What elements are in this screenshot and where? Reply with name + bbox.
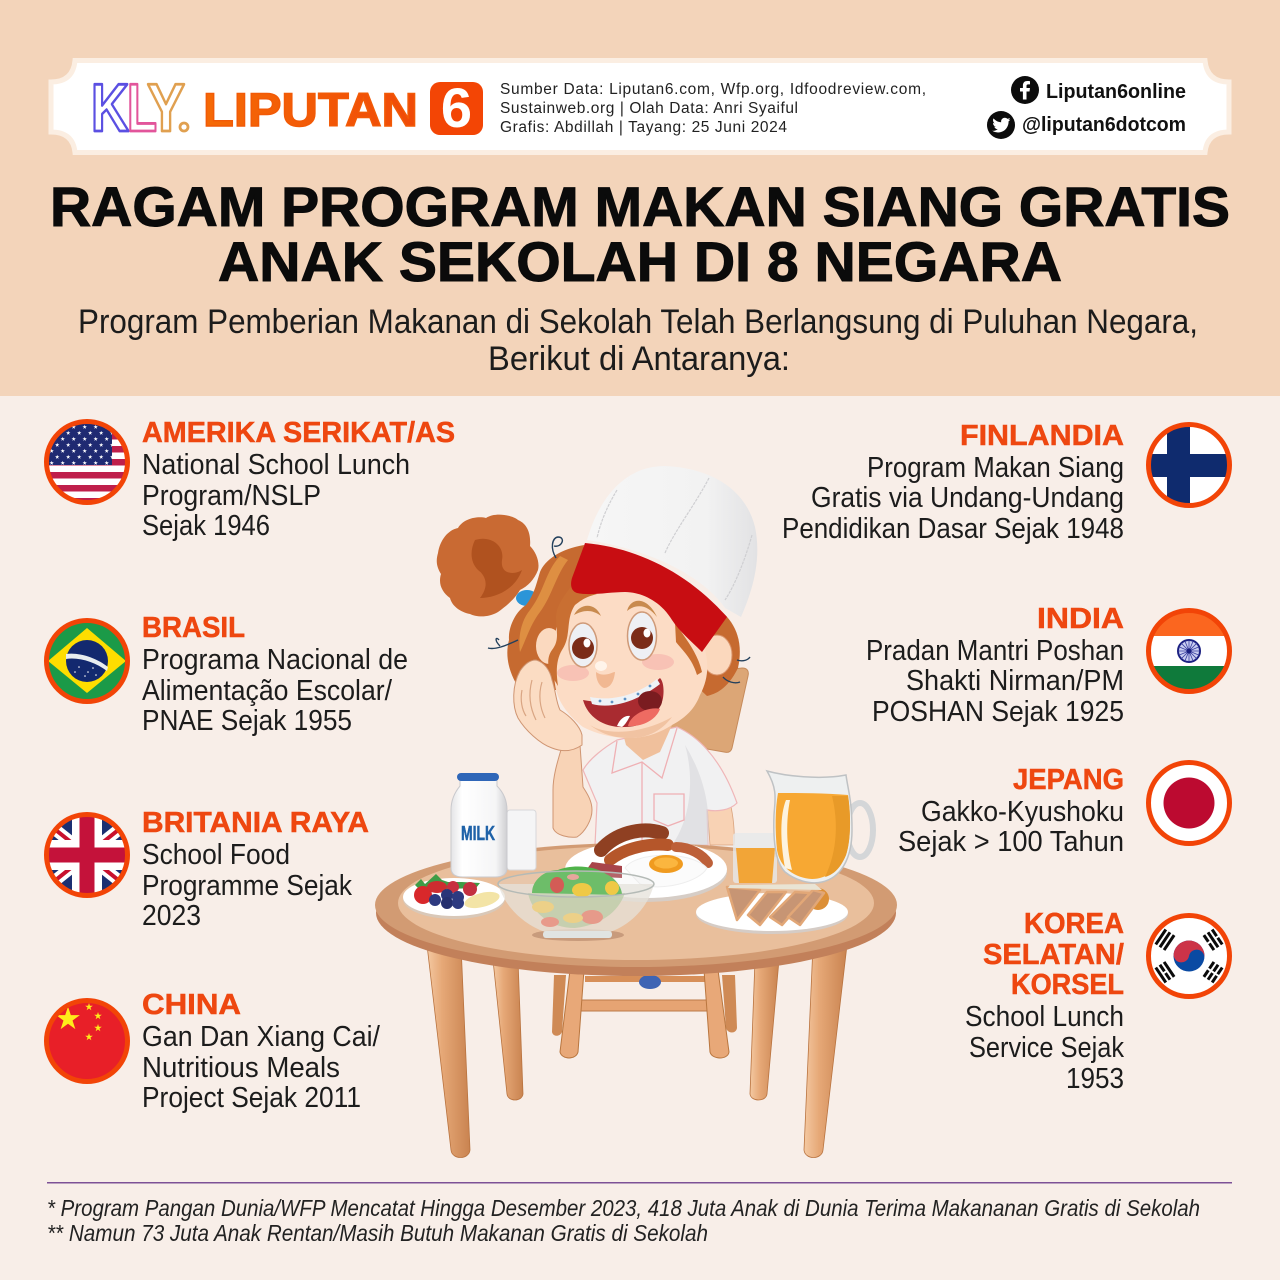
footnotes: ** Namun 73 Juta Anak Rentan/Masih Butuh Makanan Gratis di Sekolah [47, 1220, 708, 1246]
heading: SELATAN/ [983, 939, 1124, 971]
program text [142, 644, 408, 737]
panel: Jepang [898, 762, 1230, 858]
eyebrows [574, 606, 601, 616]
hair highlights [519, 556, 568, 652]
front hair [548, 585, 702, 686]
stray hair curls [488, 537, 750, 683]
subtitle: Program Pemberian Makanan di Sekolah Telah Berlangsung di Puluhan Negara, [78, 303, 1198, 341]
glass of juice [733, 833, 777, 883]
title: ANAK SEKOLAH DI 8 NEGARA [218, 230, 1062, 293]
logo: KLY [91, 70, 188, 146]
panel: Britania Raya [46, 807, 369, 932]
salad bowl [498, 862, 654, 941]
panel: Finlandia [782, 420, 1230, 545]
logo: 6 badge [430, 76, 483, 139]
header banner [51, 60, 1229, 152]
program text [142, 449, 410, 542]
icon: China flag [46, 1000, 128, 1082]
heading: KORSEL [1011, 969, 1124, 1001]
chair legs [552, 970, 737, 1058]
icon: Finland flag [1148, 424, 1230, 506]
title: RAGAM PROGRAM MAKAN SIANG GRATIS [50, 175, 1230, 238]
logo: Liputan: LIPUTAN [203, 83, 418, 136]
program text: Gratis via Undang-Undang [811, 482, 1124, 514]
source text: Sustainweb.org | Olah Data: Anri Syaiful [500, 100, 798, 117]
hat seams [597, 478, 752, 600]
program text: Programa Nacional de [142, 644, 408, 676]
subtitle [78, 303, 1198, 378]
program text: Gakko-Kyushoku [921, 796, 1124, 828]
program text [782, 452, 1124, 545]
shirt shading [672, 745, 709, 845]
milk bottle: MILK [461, 823, 495, 845]
icon: twitter [987, 111, 1015, 139]
eye right [628, 612, 656, 660]
program text: Programme Sejak [142, 870, 353, 902]
program text: 1953 [1066, 1063, 1124, 1095]
subtitle: Berikut di Antaranya: [488, 340, 790, 378]
panel: Amerika Serikat [46, 417, 455, 542]
hat [587, 466, 757, 617]
shirt collar and pocket [612, 728, 684, 845]
program text: Shakti Nirman/PM [906, 665, 1124, 697]
chair back [600, 668, 748, 752]
glass of milk [507, 810, 536, 870]
logo: KLY: Y [147, 70, 185, 146]
logo: 6 badge: 6 [441, 76, 472, 139]
program text: School Food [142, 839, 290, 871]
ear [702, 635, 732, 675]
program text: School Lunch [965, 1001, 1124, 1033]
heading: AMERIKA SERIKAT/AS [142, 417, 455, 449]
logo: KLY: L [127, 70, 157, 146]
shirt [583, 727, 737, 845]
panel: India [866, 603, 1230, 728]
program text [142, 1021, 380, 1114]
sandwich plate [696, 884, 848, 934]
egg and sausage plate [565, 830, 727, 902]
program text: Pradan Mantri Poshan [866, 635, 1124, 667]
program text: Nutritious Meals [142, 1052, 340, 1084]
illustration: girl at table [375, 466, 897, 1158]
facebook handle: Liputan6online [1046, 81, 1186, 103]
program text: 2023 [142, 900, 201, 932]
table legs [427, 945, 847, 1158]
hair tie [516, 590, 538, 606]
eye left [569, 623, 597, 667]
banner frame [51, 60, 1229, 152]
cheeks [557, 665, 589, 681]
program text [866, 635, 1124, 728]
heading [983, 908, 1124, 1001]
background: top band [0, 0, 1280, 396]
source text: Grafis: Abdillah | Tayang: 25 Juni 2024 [500, 119, 787, 136]
program text: Service Sejak [969, 1032, 1125, 1064]
heading: INDIA [1037, 603, 1124, 635]
heading: BRITANIA RAYA [142, 807, 369, 839]
left arm and hand [514, 660, 592, 837]
hair right [690, 610, 740, 696]
title [50, 175, 1230, 293]
neck [622, 725, 672, 760]
footnotes [47, 1195, 1200, 1246]
fruit plate [403, 874, 505, 919]
program text: POSHAN Sejak 1925 [872, 696, 1124, 728]
program text: PNAE Sejak 1955 [142, 705, 352, 737]
heading: CHINA [142, 989, 241, 1021]
twitter handle: @liputan6dotcom [1022, 114, 1186, 136]
icon: facebook [1011, 76, 1039, 104]
hat band [571, 543, 727, 652]
icon: US flag [46, 422, 128, 504]
program text: Sejak > 100 Tahun [898, 826, 1124, 858]
program text [898, 796, 1124, 858]
icon: India flag [1148, 610, 1230, 692]
program text: Project Sejak 2011 [142, 1082, 361, 1114]
icon: Japan flag [1148, 762, 1230, 844]
mouth [583, 678, 664, 727]
program text [142, 839, 353, 932]
table top [375, 843, 897, 976]
program text: Program Makan Siang [867, 452, 1124, 484]
logo: KLY: K [91, 70, 129, 146]
right arm [707, 802, 734, 845]
source text [500, 81, 926, 136]
nose [595, 661, 615, 688]
face [554, 585, 707, 738]
panel: China [46, 989, 380, 1114]
chin shade [590, 717, 672, 738]
heading: KOREA [1024, 908, 1124, 940]
source text: Sumber Data: Liputan6.com, Wfp.org, Idfoodreview.com, [500, 81, 926, 98]
juice jug [767, 771, 873, 883]
icon: Brazil flag [46, 620, 128, 702]
program text: National School Lunch [142, 449, 410, 481]
heading: FINLANDIA [960, 420, 1124, 452]
temple [536, 628, 562, 664]
heading: JEPANG [1013, 764, 1124, 796]
hair left [507, 545, 584, 690]
program text: Program/NSLP [142, 480, 321, 512]
icon: UK flag [46, 814, 128, 896]
heading: BRASIL [142, 612, 245, 644]
program text: Alimentação Escolar/ [142, 675, 392, 707]
program text: Gan Dan Xiang Cai/ [142, 1021, 380, 1053]
milk bottle [451, 773, 507, 877]
program text: Sejak 1946 [142, 510, 270, 542]
panel: Brasil [46, 612, 408, 737]
hair bun [437, 515, 539, 616]
panel: Korea Selatan [965, 908, 1230, 1095]
program text: Pendidikan Dasar Sejak 1948 [782, 513, 1124, 545]
program text [965, 1001, 1125, 1095]
icon: South Korea flag [1148, 916, 1230, 996]
